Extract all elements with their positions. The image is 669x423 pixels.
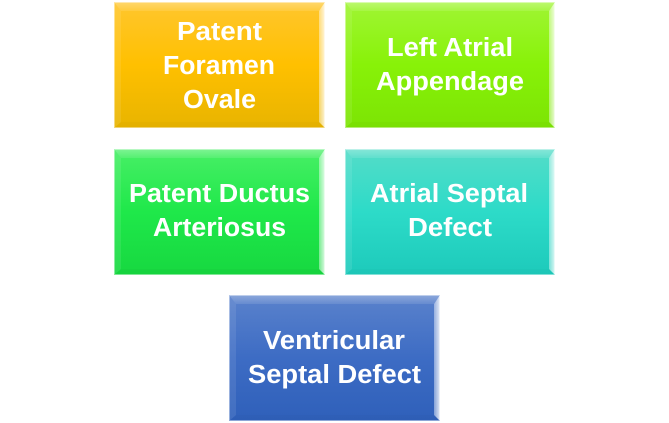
label: Left Atrial Appendage: Left Atrial — [387, 34, 513, 62]
label: Left Atrial Appendage: Appendage — [376, 68, 524, 96]
label: Patent Foramen Ovale — [163, 18, 275, 114]
label: Patent Foramen Ovale: Ovale — [183, 86, 256, 114]
label: Atrial Septal Defect: Defect — [408, 214, 493, 242]
panel: Atrial Septal Defect — [345, 149, 555, 275]
label: Patent Ductus Arteriosus: Arteriosus — [153, 214, 286, 242]
panel: Patent Ductus Arteriosus — [114, 149, 325, 275]
label: Atrial Septal Defect — [370, 180, 528, 242]
label: Left Atrial Appendage — [376, 34, 524, 96]
label: Atrial Septal Defect: Atrial Septal — [370, 180, 528, 208]
panel: Patent Foramen Ovale — [114, 2, 325, 128]
label: Patent Ductus Arteriosus: Patent Ductus — [129, 180, 310, 208]
label: Ventricular Septal Defect — [248, 327, 422, 389]
label: Ventricular Septal Defect: Ventricular — [263, 327, 405, 355]
panel: Ventricular Septal Defect — [229, 295, 440, 421]
label: Patent Ductus Arteriosus — [129, 180, 310, 242]
label: Patent Foramen Ovale: Patent — [177, 18, 263, 46]
label: Patent Foramen Ovale: Foramen — [163, 52, 275, 80]
label: Ventricular Septal Defect: Septal Defect — [248, 361, 422, 389]
panel: Left Atrial Appendage — [345, 2, 555, 128]
